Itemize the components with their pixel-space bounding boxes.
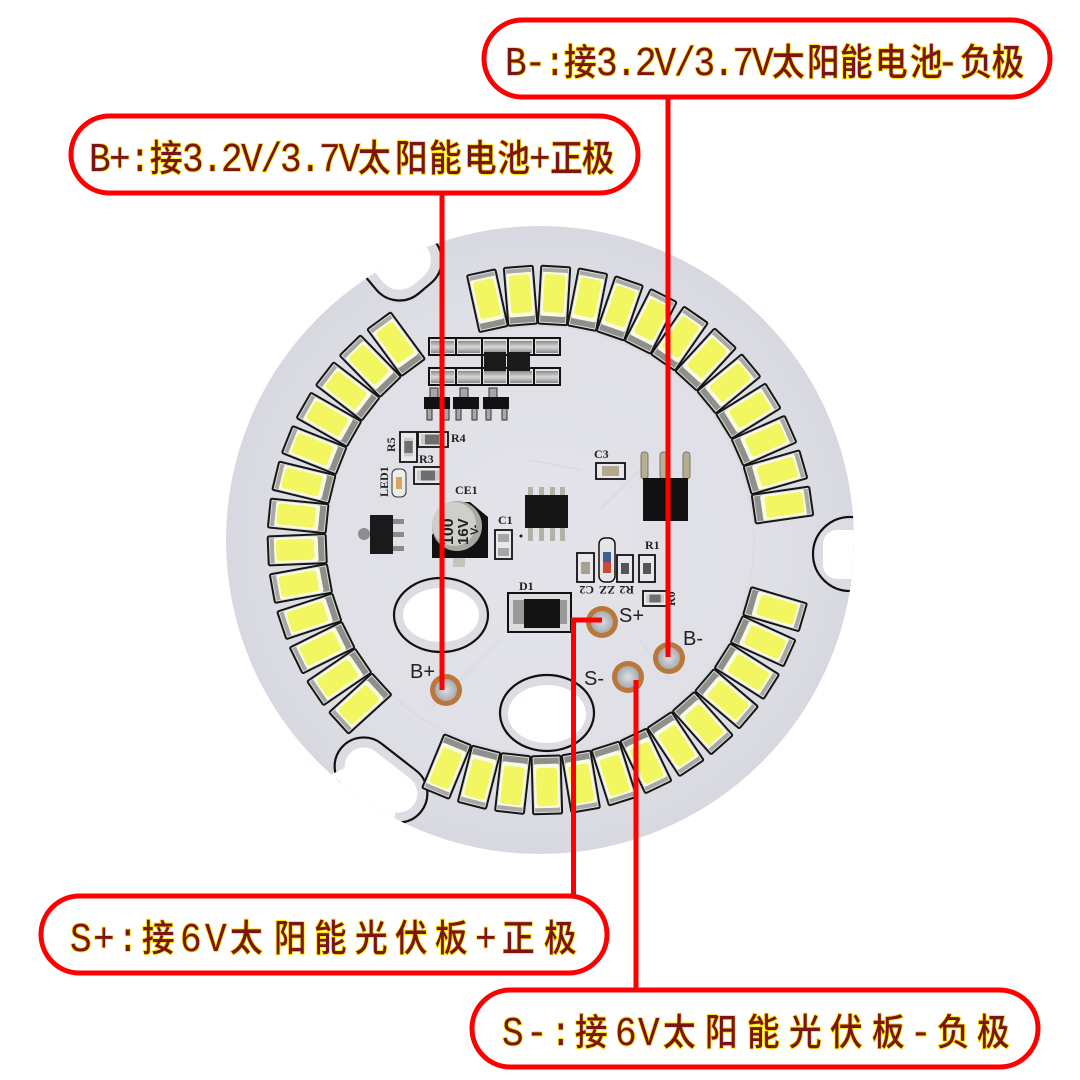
solder pad: B+ xyxy=(430,674,462,706)
electrolytic capacitor CE1: 16V xyxy=(455,518,472,545)
callout: S-: 6V xyxy=(615,1011,660,1058)
left SOT component xyxy=(358,515,404,554)
circuit board xyxy=(226,207,887,854)
small SMD cluster C2 ZZ R2 R1 R0: C2 xyxy=(579,583,594,597)
slot: right xyxy=(812,516,854,592)
slot: bottom left xyxy=(332,736,428,824)
small resistors R3 R4 R5: R4 xyxy=(451,431,466,445)
slot: top left xyxy=(366,243,440,302)
small SMD cluster C2 ZZ R2 R1 R0 xyxy=(577,538,678,606)
small resistors R3 R4 R5 xyxy=(384,431,466,484)
small SMD cluster C2 ZZ R2 R1 R0: R2 xyxy=(619,583,634,597)
electrolytic capacitor CE1: V- xyxy=(469,524,481,535)
Diode D1: D1 xyxy=(519,579,534,593)
board disc xyxy=(226,226,854,854)
capacitor C1 xyxy=(495,513,513,559)
LED1 indicator: LED1 xyxy=(377,466,391,497)
three-pin component xyxy=(641,452,690,521)
silkscreen labels: B- xyxy=(683,628,703,650)
callout: S+: 6V xyxy=(180,917,227,964)
small resistors R3 R4 R5: R3 xyxy=(419,452,434,466)
IC chip xyxy=(520,487,568,541)
callout: B+: B+: xyxy=(89,137,151,184)
callout: S+: 接 xyxy=(142,910,175,963)
oval hole left xyxy=(394,578,488,652)
callout: B-: - xyxy=(937,41,959,88)
black resistors xyxy=(484,352,506,371)
callout: S-: - xyxy=(910,1011,932,1058)
solder pad: B- xyxy=(653,642,685,674)
callout: B+: + xyxy=(529,137,551,184)
callout: B- xyxy=(484,20,1050,97)
callout: S- xyxy=(472,990,1038,1067)
wire: S+ xyxy=(574,620,602,896)
callout: B+: 太阳能电池 xyxy=(358,130,530,183)
mounting slots xyxy=(323,207,887,835)
LED ring: upper right xyxy=(467,266,813,524)
callout: B-: 3.2V/3.7V xyxy=(596,41,774,88)
Diode D1 xyxy=(508,579,571,632)
callout: B-: B-: xyxy=(505,41,566,88)
callout: S-: 接 xyxy=(575,1004,608,1057)
electrolytic capacitor CE1 xyxy=(432,483,488,567)
solder pad: S- xyxy=(612,661,644,693)
small SMD cluster C2 ZZ R2 R1 R0: R0 xyxy=(664,591,678,606)
small SMD cluster C2 ZZ R2 R1 R0: R1 xyxy=(645,538,660,552)
faint copper traces xyxy=(326,326,754,754)
silkscreen labels: S- xyxy=(584,668,604,690)
wire: B- xyxy=(666,97,670,657)
electrolytic capacitor CE1: 100 xyxy=(440,518,457,545)
callout: S-: S-: xyxy=(502,1011,572,1058)
callout: S+: 正极 xyxy=(502,910,577,963)
callout: S+ xyxy=(41,896,607,973)
callout: B-: 太阳能电池 xyxy=(772,34,943,87)
capacitor C3: C3 xyxy=(594,447,609,461)
callout: B+: 正极 xyxy=(550,130,614,183)
capacitor C1: C1 xyxy=(498,513,513,527)
resistor pad array xyxy=(429,338,560,385)
capacitor C3 xyxy=(594,447,625,479)
callout: B+ xyxy=(71,116,638,193)
small resistors R3 R4 R5: R5 xyxy=(384,437,398,452)
wire: B+ xyxy=(440,193,444,690)
callout: S-: 太阳能光伏板 xyxy=(663,1004,905,1057)
callout: S+: 太阳能光伏板 xyxy=(230,910,468,963)
callout: B-: 接 xyxy=(564,34,597,87)
callout: B+: 接 xyxy=(150,130,183,183)
LED ring: lower right xyxy=(422,587,807,814)
silkscreen labels: B+ xyxy=(410,661,435,683)
silkscreen labels xyxy=(410,605,703,690)
callout: B+: 3.2V/3.7V xyxy=(182,137,360,184)
oval hole bottom xyxy=(500,675,594,751)
callout: S+: + xyxy=(475,917,497,964)
small SMD cluster C2 ZZ R2 R1 R0: ZZ xyxy=(599,583,615,597)
pad outlines xyxy=(429,338,560,385)
electrolytic capacitor CE1: CE1 xyxy=(455,483,478,497)
metal pads xyxy=(431,341,558,383)
LED ring: left xyxy=(268,312,425,734)
solder pad: S+ xyxy=(586,606,618,638)
callout: S+: S+: xyxy=(70,917,139,964)
callout: B-: 负极 xyxy=(960,34,1024,87)
SOT transistors xyxy=(424,388,509,420)
wire: S- xyxy=(634,680,638,990)
callout: S-: 负极 xyxy=(937,1004,1010,1057)
LED1 indicator xyxy=(377,466,406,497)
silkscreen labels: S+ xyxy=(619,605,644,627)
